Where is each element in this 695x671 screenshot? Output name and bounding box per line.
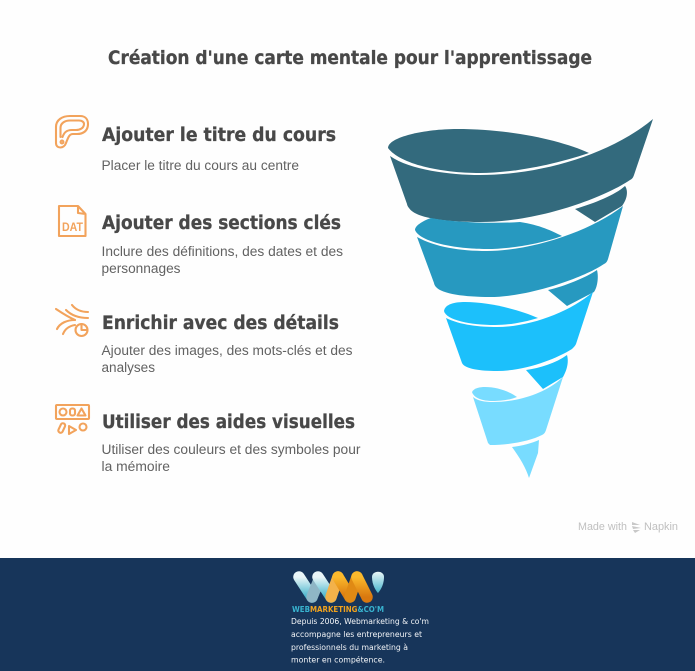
description: [102, 343, 353, 375]
logo mark: [299, 572, 384, 597]
heading: Enrichir avec des détails: [102, 313, 339, 334]
footer description: monter en compétence.: [291, 654, 385, 664]
footer description: Depuis 2006, Webmarketing & co'm: [291, 617, 429, 626]
step 1: add course title: [56, 116, 336, 173]
description: [102, 244, 343, 276]
step 2: add key sections: [59, 206, 343, 276]
description: Utiliser des couleurs et des symboles pour: [102, 442, 361, 457]
heading: Ajouter des sections clés: [102, 213, 341, 234]
heading: Utiliser des aides visuelles: [102, 412, 355, 433]
description: [102, 442, 361, 474]
icon: DAT file: [59, 206, 86, 236]
tier 3: bright blue: [444, 292, 593, 389]
title: Création d'une carte mentale pour l'apprentissage: [108, 47, 592, 69]
icon: shapes: [56, 405, 89, 434]
description: personnages: [102, 261, 181, 276]
heading: Ajouter le titre du cours: [102, 125, 336, 146]
footer description: accompagne les entrepreneurs et: [291, 630, 422, 639]
watermark: Made with Napkin: [578, 521, 678, 533]
icon: letter P outline: [56, 116, 88, 148]
description: Inclure des définitions, des dates et des: [102, 244, 343, 259]
footer band: [0, 558, 695, 671]
watermark: Made with Napkin: Made with: [578, 521, 627, 533]
tier 1: dark teal: [388, 119, 653, 222]
watermark: Made with Napkin: Napkin: [644, 521, 678, 533]
footer description: professionnels du marketing à: [291, 643, 408, 652]
tier 4: light blue: [472, 377, 563, 478]
funnel spiral: [388, 119, 653, 478]
footer description: [291, 617, 429, 664]
icon: flowing lines with pie chart: [56, 305, 88, 336]
icon: DAT file: DAT: [62, 220, 84, 234]
tier 2: medium blue: [415, 206, 623, 306]
logo wordmark: WEBMARKETING&CO'M: [292, 605, 384, 614]
description: Placer le titre du cours au centre: [102, 158, 299, 173]
step 3: enrich with details: [56, 305, 353, 375]
footer logo: [292, 572, 384, 614]
description: Ajouter des images, des mots-clés et des: [102, 343, 353, 358]
description: la mémoire: [102, 459, 170, 474]
description: analyses: [102, 360, 155, 375]
step 4: use visual aids: [56, 405, 361, 474]
